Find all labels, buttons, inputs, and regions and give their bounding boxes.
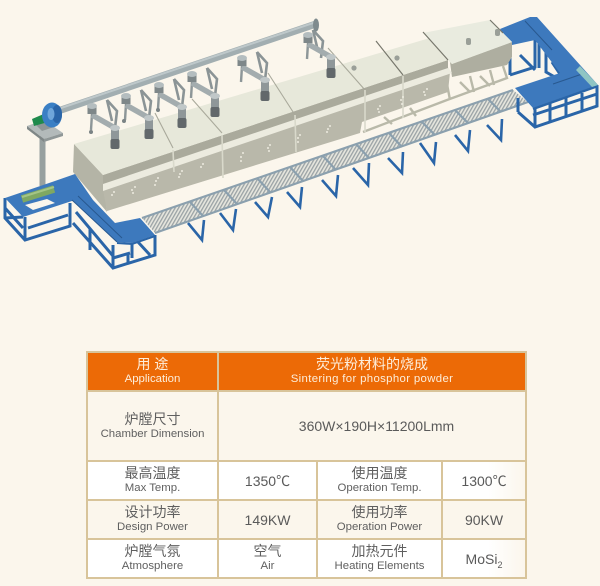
heating elements label (316, 538, 443, 579)
max temp value (217, 460, 318, 501)
chamber dimension label: 炉膛尺寸 (124, 410, 180, 426)
operation temp label (316, 460, 443, 501)
atmosphere label (86, 538, 219, 579)
design power label: 设计功率 (124, 504, 180, 520)
heating elements value: MoSi2 (466, 550, 502, 569)
brackets behind exhaust pipe (107, 30, 323, 128)
roof seams (155, 48, 365, 148)
atmosphere value (217, 538, 318, 579)
atmosphere label: Atmosphere (122, 560, 183, 572)
specification table (86, 351, 527, 579)
atmosphere label: 炉膛气氛 (124, 543, 180, 559)
header: sintering: 荧光粉材料的烧成 (316, 356, 428, 372)
furnace body (73, 20, 512, 212)
max temp value: 1350℃ (245, 472, 290, 488)
operation temp label: 使用温度 (352, 465, 408, 481)
chamber dimension label (86, 390, 219, 462)
header: sintering: Sintering for phosphor powder (291, 373, 453, 385)
max temp label: 最高温度 (124, 465, 180, 481)
illustration: sintering furnace line (4, 17, 598, 270)
heating elements label: Heating Elements (335, 560, 424, 572)
chamber dimension value (217, 390, 527, 462)
conveyor grating (142, 90, 528, 233)
operation power value: 90KW (465, 512, 503, 528)
blower (32, 102, 62, 128)
heating elements value (441, 538, 527, 579)
header: application: Application (125, 373, 180, 385)
right blue transfer table (500, 17, 598, 127)
operation temp value: 1300℃ (461, 472, 507, 488)
max temp label: Max Temp. (125, 482, 180, 494)
exhaust pipe (58, 18, 319, 111)
atmosphere value: 空气 (254, 543, 282, 559)
light strip (103, 67, 452, 191)
design power label: Design Power (117, 521, 188, 533)
heating elements label: 加热元件 (352, 543, 408, 559)
operation power label: Operation Power (337, 521, 422, 533)
design power value (217, 499, 318, 540)
max temp label (86, 460, 219, 501)
header: application: 用 途 (137, 356, 168, 372)
exhaust ducts (87, 32, 336, 149)
operation temp label: Operation Temp. (338, 482, 422, 494)
right section wall (450, 42, 512, 77)
chamber dimension value: 360W×190H×11200Lmm (299, 418, 454, 434)
operation power label (316, 499, 443, 540)
operation power value (441, 499, 527, 540)
stand for blower (27, 118, 63, 186)
roof (74, 20, 512, 175)
atmosphere value: Air (261, 560, 274, 572)
front wall (103, 72, 450, 211)
design power label (86, 499, 219, 540)
header: application (86, 351, 219, 392)
fascia (103, 60, 448, 184)
furnace frame under right section (363, 66, 507, 132)
chamber dimension label: Chamber Dimension (101, 428, 204, 440)
left blue transfer table (5, 174, 155, 268)
header: sintering (217, 351, 527, 392)
left end face (73, 144, 107, 212)
conveyor support legs (188, 119, 502, 240)
design power value: 149KW (245, 512, 290, 528)
operation temp value (441, 460, 527, 501)
roof vents (351, 29, 500, 71)
wall bolt clusters (111, 88, 428, 196)
operation power label: 使用功率 (352, 504, 408, 520)
